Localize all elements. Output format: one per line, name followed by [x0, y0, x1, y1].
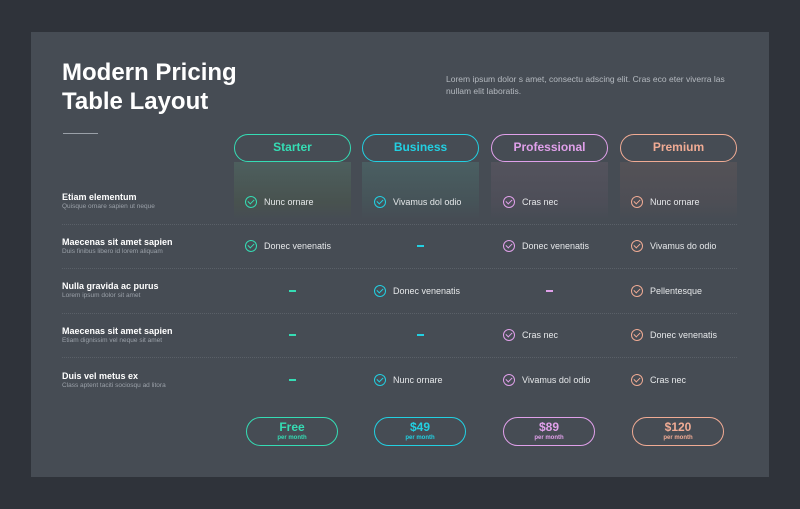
row labels: Duis finibus libero id lorem aliquam: [62, 248, 163, 255]
row labels: Etiam dignissim vel neque sit amet: [62, 337, 162, 344]
row labels: Quisque ornare sapien ut neque: [62, 203, 155, 210]
table cells: Vivamus dol odio: [393, 197, 461, 207]
header pill: Professional: [491, 134, 608, 162]
row labels: Nulla gravida ac purus: [62, 281, 159, 291]
header pill: Professional: Professional: [513, 140, 586, 154]
price: Free: per month: [277, 435, 307, 441]
row labels: [62, 192, 173, 389]
price: $89: $89: [539, 420, 559, 434]
price: $89: per month: [534, 435, 564, 441]
price: $120: [632, 417, 724, 446]
header pill: Business: Business: [394, 140, 447, 154]
table cells: Nunc ornare: [264, 197, 314, 207]
table cells: Cras nec: [650, 375, 686, 385]
price: $49: per month: [405, 435, 435, 441]
row labels: Class aptent taciti sociosqu ad litora: [62, 382, 166, 389]
price: $120: $120: [665, 420, 691, 434]
header pill: Premium: [620, 134, 737, 162]
title: Modern Pricing: [62, 59, 237, 86]
table cells: Nunc ornare: [650, 197, 700, 207]
header pill: Premium: Premium: [653, 140, 704, 154]
header pill: Business: [362, 134, 479, 162]
row labels: Etiam elementum: [62, 192, 137, 202]
description text: Lorem ipsum dolor s amet, consectu adscing elit. Cras eco eter viverra las nullam elit laboratis.: [446, 74, 725, 96]
title: [62, 59, 237, 115]
header pill: Starter: [234, 134, 351, 162]
price: $120: per month: [663, 435, 693, 441]
price: $49: $49: [410, 420, 430, 434]
row labels: Duis vel metus ex: [62, 371, 138, 381]
price: Free: Free: [279, 420, 305, 434]
row labels: Maecenas sit amet sapien: [62, 326, 173, 336]
table cells: Cras nec: [522, 197, 558, 207]
row labels: Lorem ipsum dolor sit amet: [62, 292, 140, 299]
header pill: Starter: Starter: [273, 140, 312, 154]
table cells: Vivamus dol odio: [522, 375, 590, 385]
table cells: Vivamus do odio: [650, 241, 716, 251]
table cells: Cras nec: [522, 330, 558, 340]
price: Free: [246, 417, 338, 446]
table cells: Nunc ornare: [393, 375, 443, 385]
table cells: Donec venenatis: [650, 330, 717, 340]
title: Table Layout: [62, 88, 208, 115]
table cells: Donec venenatis: [393, 286, 460, 296]
price: $49: [374, 417, 466, 446]
row labels: Maecenas sit amet sapien: [62, 237, 173, 247]
price: $89: [503, 417, 595, 446]
table cells: Donec venenatis: [264, 241, 331, 251]
table cells: Pellentesque: [650, 286, 702, 296]
title underline: [63, 133, 98, 134]
table cells: Donec venenatis: [522, 241, 589, 251]
